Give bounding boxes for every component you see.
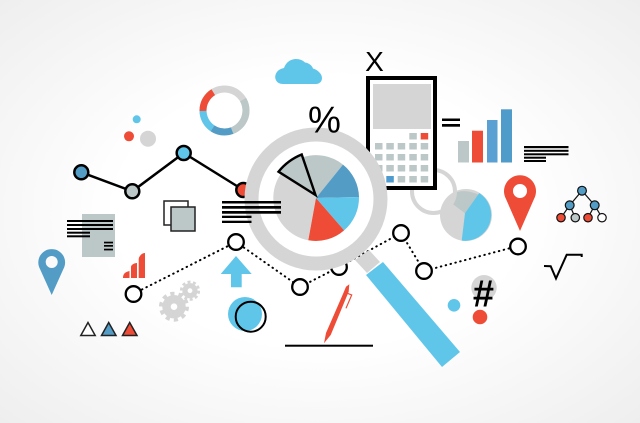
dotted line chart xyxy=(126,225,526,302)
line chart: upper xyxy=(74,146,250,198)
icon: red map pin xyxy=(504,175,536,231)
icon: blue map pin xyxy=(38,249,65,295)
text lines: right of bar chart xyxy=(524,146,568,162)
overlapping squares icon xyxy=(164,201,195,231)
decorative dots: top left xyxy=(124,115,156,147)
text lines: over magnifier xyxy=(222,201,281,223)
icon: signal bars xyxy=(123,253,145,278)
hash icon with dots: # xyxy=(473,274,494,316)
icon: cloud xyxy=(275,59,322,84)
small pie chart xyxy=(440,189,492,241)
circle pair icon xyxy=(228,297,266,332)
magnifying glass xyxy=(252,134,460,367)
percent sign: % xyxy=(308,100,341,140)
icon: pen on line xyxy=(285,284,373,347)
multiplication sign: X xyxy=(365,46,384,77)
square root symbol xyxy=(544,255,582,278)
icon: up arrow xyxy=(221,256,252,287)
ring behind calculator xyxy=(412,170,455,213)
equals sign xyxy=(442,118,460,127)
triangles xyxy=(81,322,137,336)
document icon xyxy=(67,214,115,257)
icon: gears xyxy=(161,282,199,320)
hash icon with dots xyxy=(448,274,497,324)
donut chart xyxy=(203,89,246,132)
bar chart xyxy=(458,109,512,162)
calculator xyxy=(368,78,435,188)
pie chart in lens xyxy=(273,154,359,241)
tree diagram xyxy=(557,186,606,222)
